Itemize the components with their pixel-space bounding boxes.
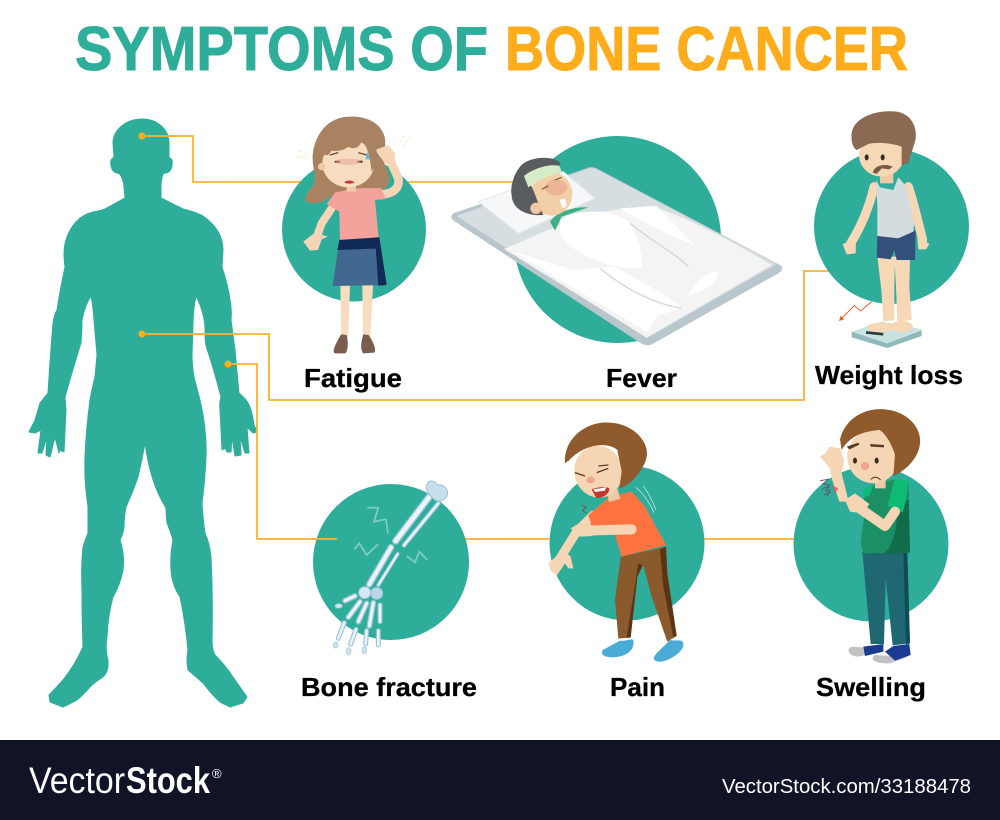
circle: pain — [550, 466, 704, 620]
label: swelling: Swelling — [816, 672, 926, 702]
icon: boy with swollen arm — [820, 409, 920, 663]
icon: sick child in bed — [451, 158, 782, 345]
icon: tired girl — [298, 117, 410, 353]
icon: boy in pain — [548, 423, 683, 662]
footer bar — [0, 740, 1000, 820]
circle: swelling — [794, 466, 948, 622]
circle: fever — [514, 136, 721, 343]
panel: fatigue — [282, 117, 426, 353]
connector lines — [142, 136, 830, 539]
label: fatigue: Fatigue — [304, 363, 402, 393]
marker: torso — [138, 330, 146, 338]
label: pain: Pain — [610, 672, 665, 702]
title: BONE CANCER — [505, 15, 908, 84]
circle: weight loss — [814, 149, 969, 304]
panel: swelling — [794, 409, 948, 663]
body silhouette — [29, 119, 257, 707]
panel: bone fracture — [312, 481, 469, 655]
footer logo: Vector — [29, 760, 125, 801]
connector end on circle — [312, 538, 337, 540]
label: bone fracture: Bone fracture — [301, 672, 477, 702]
footer logo: ® — [212, 766, 222, 781]
panel: pain — [548, 423, 704, 662]
circle: fatigue — [282, 158, 426, 302]
panel: fever — [451, 136, 782, 345]
label: fever: Fever — [606, 363, 677, 393]
icon: man on scale — [839, 111, 929, 348]
panel: weight loss — [814, 111, 969, 348]
label: weight loss: Weight loss — [815, 360, 963, 390]
footer logo: Stock — [126, 760, 210, 801]
circle: bone fracture — [313, 484, 469, 640]
marker: arm — [224, 360, 232, 368]
title: SYMPTOMS OF — [75, 15, 488, 84]
icon: fractured arm bones — [333, 481, 448, 655]
footer image id: VectorStock.com/33188478 — [722, 776, 971, 798]
marker: head — [138, 132, 146, 140]
